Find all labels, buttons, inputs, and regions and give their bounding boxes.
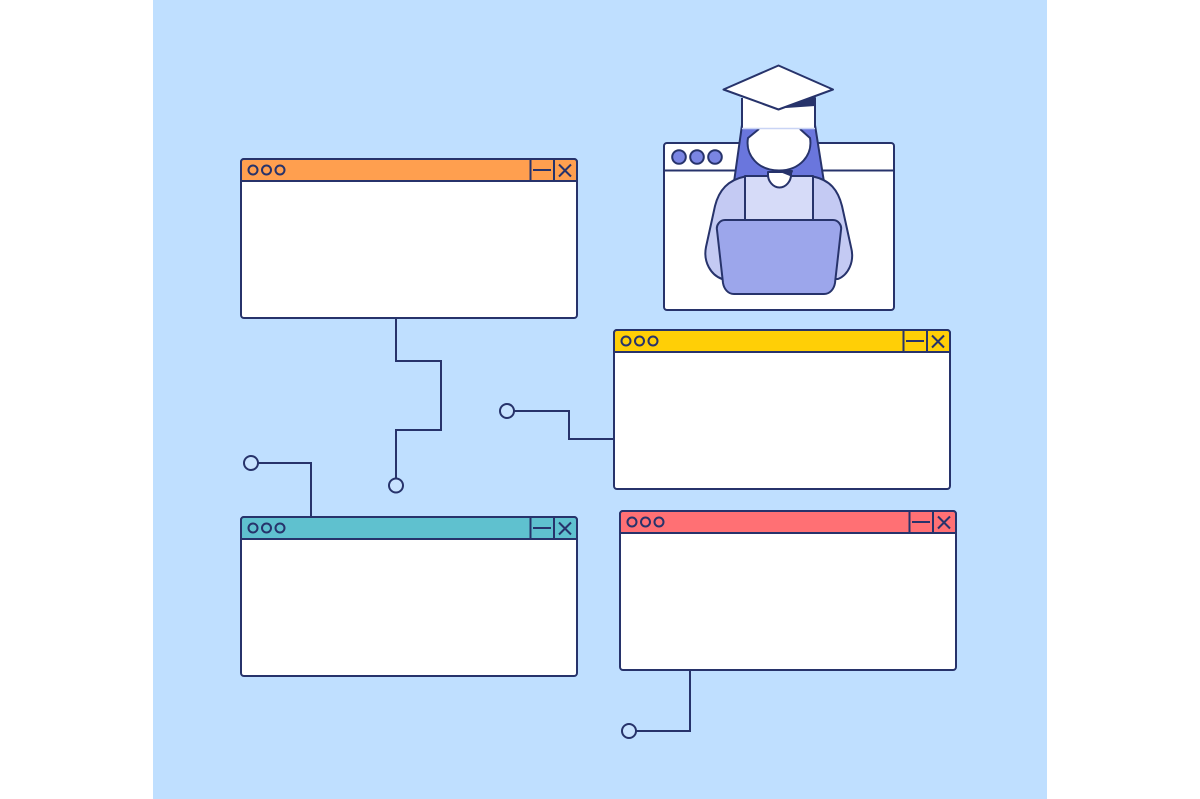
window: red bbox=[620, 511, 956, 670]
window: graduate browser bbox=[664, 143, 894, 310]
face bbox=[748, 129, 810, 170]
cap band bbox=[742, 98, 815, 128]
connector: red window to node bbox=[622, 670, 690, 738]
connector: orange window to node bbox=[389, 318, 441, 492]
neck bbox=[768, 172, 791, 188]
connector: teal window to node bbox=[244, 456, 311, 517]
background panel bbox=[153, 0, 1047, 799]
mortarboard bbox=[724, 66, 833, 110]
laptop bbox=[717, 220, 841, 294]
connector: yellow window to node bbox=[500, 404, 614, 439]
window: orange bbox=[241, 159, 577, 318]
arms and shoulders bbox=[705, 176, 852, 279]
shirt bbox=[745, 176, 813, 221]
cap tassel shadow bbox=[786, 98, 815, 107]
window: teal bbox=[241, 517, 577, 676]
window: yellow bbox=[614, 330, 950, 489]
hair bbox=[734, 125, 824, 182]
figure: graduate with laptop bbox=[705, 66, 852, 294]
